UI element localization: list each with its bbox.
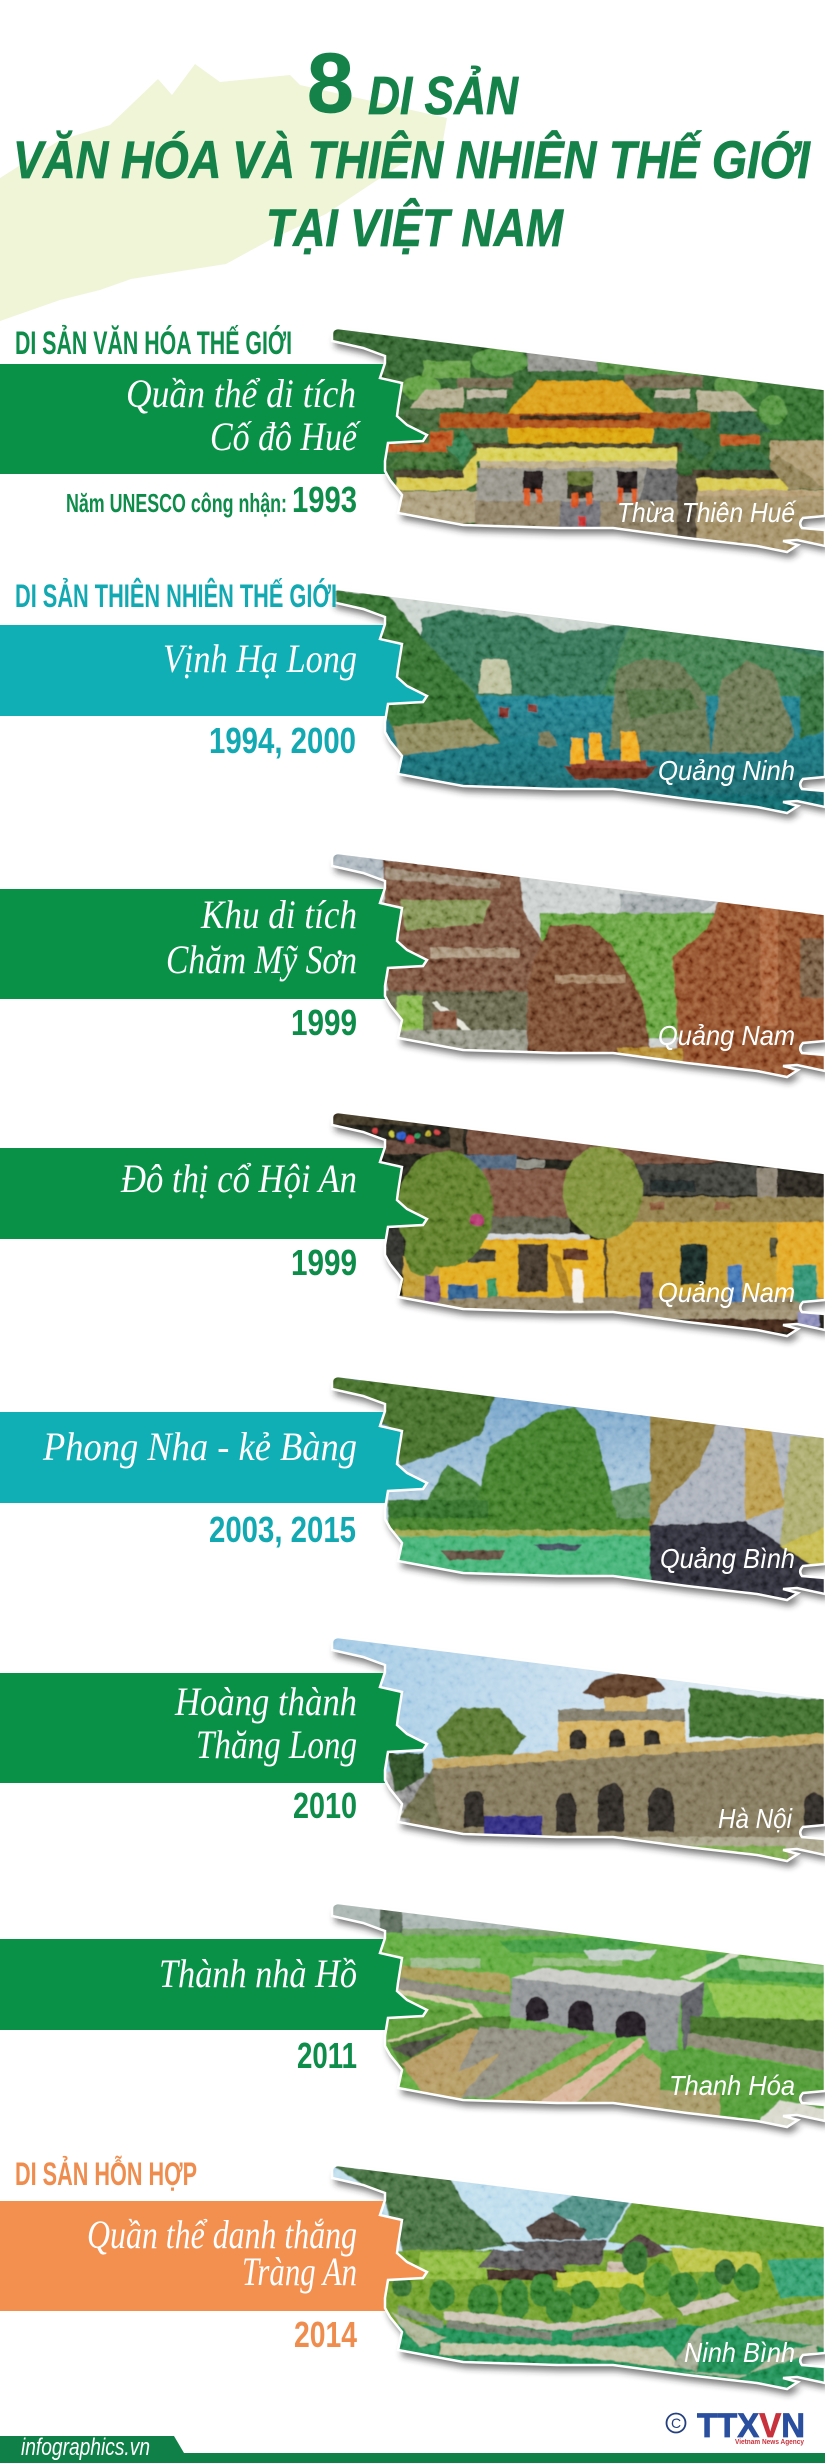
shadow bbox=[335, 1909, 825, 2133]
section heading: mixed heritage: DI SẢN HỖN HỢP bbox=[15, 2156, 197, 2192]
photo: Thăng Long gate bbox=[325, 1632, 825, 1869]
location label: Thừa Thiên Huế bbox=[617, 497, 797, 528]
site name: Mỹ Sơn: Chăm Mỹ Sơn bbox=[166, 937, 357, 982]
panel: Tràng An bbox=[0, 2160, 825, 2397]
photo: Huế imperial gate bbox=[325, 323, 825, 563]
year: 1994, 2000: 1994, 2000 bbox=[209, 720, 356, 761]
year: 2011: 2011 bbox=[297, 2035, 357, 2076]
photo outline bbox=[332, 2165, 825, 2389]
shadow bbox=[335, 2171, 825, 2395]
site name: Thăng Long: Hoàng thành bbox=[174, 1679, 357, 1724]
site name: Thăng Long: Thăng Long bbox=[196, 1722, 357, 1767]
site name: Mỹ Sơn: Khu di tích bbox=[200, 892, 357, 937]
panel: Phong Nha - Kẻ Bàng bbox=[0, 1371, 825, 1608]
shadow bbox=[335, 1382, 825, 1606]
ribbon: orange bbox=[0, 2201, 427, 2311]
location label: Quảng Bình bbox=[660, 1543, 795, 1574]
panel: Hoàng thành Thăng Long bbox=[0, 1632, 825, 1869]
panel: Thành nhà Hồ bbox=[0, 1898, 825, 2138]
photo outline bbox=[332, 1112, 825, 1336]
photo outline bbox=[332, 328, 825, 552]
shadow bbox=[335, 859, 825, 1083]
shadow bbox=[335, 334, 825, 558]
ribbon: teal bbox=[0, 1412, 427, 1503]
location label: Hà Nội bbox=[718, 1803, 793, 1834]
location label: Ninh Bình bbox=[684, 2337, 795, 2368]
site name: Thăng Long bbox=[174, 1679, 357, 1767]
background: pale green map shape bbox=[0, 64, 447, 321]
year: 2014: 2014 bbox=[294, 2314, 357, 2355]
title line 1 bbox=[307, 36, 519, 130]
recognition year: 1993: Năm UNESCO công nhận: bbox=[66, 488, 287, 518]
photo: Tràng An temple bbox=[325, 2160, 825, 2397]
ribbon: green bbox=[0, 1148, 427, 1239]
site name: Huế: Cố đô Huế bbox=[210, 414, 361, 459]
photo outline bbox=[332, 1903, 825, 2127]
section heading: world cultural heritage: DI SẢN VĂN HÓA THẾ GIỚI bbox=[15, 325, 292, 361]
footer site name: infographics.vn bbox=[21, 2434, 150, 2461]
site name: Hạ Long: Vịnh Hạ Long bbox=[163, 636, 357, 681]
site name: Huế: Quần thể di tích bbox=[126, 371, 356, 416]
logo: TTXVN: Vietnam News Agency bbox=[735, 2439, 804, 2446]
photo outline bbox=[332, 589, 825, 813]
site name: Huế bbox=[126, 371, 361, 459]
years: 2003, 2015: 2003, 2015 bbox=[209, 1509, 356, 1550]
ribbon: green bbox=[0, 364, 427, 474]
photo outline bbox=[332, 1376, 825, 1600]
location label: Quảng Nam bbox=[658, 1277, 795, 1308]
site name: Mỹ Sơn bbox=[166, 892, 357, 982]
title line 3: TẠI VIỆT NAM bbox=[266, 197, 565, 258]
photo outline bbox=[332, 853, 825, 1077]
photo: Hội An street bbox=[325, 1107, 825, 1347]
logo: TTXVN: TTXVN bbox=[697, 2407, 805, 2445]
ribbon: green bbox=[0, 1673, 427, 1783]
location label: Thanh Hóa bbox=[669, 2070, 795, 2101]
panel: Cố đô Huế bbox=[0, 323, 825, 563]
location label: Quảng Nam bbox=[658, 1020, 795, 1051]
ribbon: green bbox=[0, 1939, 427, 2030]
site name: Tràng An bbox=[87, 2212, 357, 2294]
year: 1999: 1999 bbox=[291, 1002, 357, 1043]
footer strip bbox=[0, 2434, 825, 2463]
photo: Hồ citadel bbox=[325, 1898, 825, 2138]
year: 2010: 2010 bbox=[293, 1785, 357, 1826]
location label: Quảng Ninh bbox=[658, 755, 795, 786]
ribbon: green bbox=[0, 889, 427, 999]
photo: Mỹ Sơn towers bbox=[325, 848, 825, 1088]
title line 1: DI SẢN bbox=[368, 66, 519, 126]
panel: Mỹ Sơn bbox=[0, 848, 825, 1088]
ribbon: teal bbox=[0, 625, 427, 716]
title line 1: 8 bbox=[307, 36, 354, 130]
section heading: world natural heritage: DI SẢN THIÊN NHIÊN THẾ GIỚI bbox=[15, 578, 337, 614]
logo: TTXVN: C bbox=[671, 2415, 681, 2431]
panel: Hội An bbox=[0, 1107, 825, 1347]
year: 1999: 1999 bbox=[291, 1242, 357, 1283]
panel: Vịnh Hạ Long bbox=[0, 584, 825, 821]
shadow bbox=[335, 1643, 825, 1867]
site name: Phong Nha: Phong Nha - kẻ Bàng bbox=[42, 1424, 357, 1469]
shadow bbox=[335, 1118, 825, 1342]
site name: Tràng An: Quần thể danh thắng bbox=[87, 2212, 357, 2257]
photo: Hạ Long bay bbox=[325, 584, 825, 821]
site name: Thành nhà Hồ: Thành nhà Hồ bbox=[159, 1951, 357, 1996]
photo outline bbox=[332, 1637, 825, 1861]
recognition year: 1993 bbox=[66, 479, 357, 520]
site name: Hội An: Đô thị cổ Hội An bbox=[120, 1156, 357, 1201]
shadow bbox=[335, 595, 825, 819]
site name: Tràng An: Tràng An bbox=[242, 2249, 357, 2294]
recognition year: 1993: 1993 bbox=[292, 479, 357, 520]
photo: mountain and cave bbox=[325, 1371, 825, 1608]
title bbox=[13, 36, 811, 258]
